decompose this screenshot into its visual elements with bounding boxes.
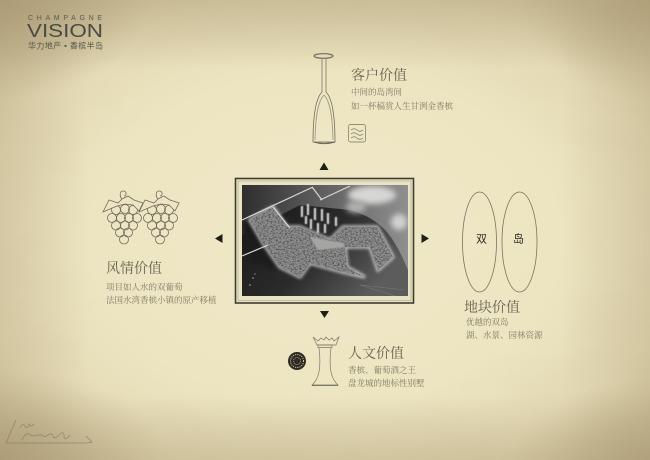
heading: land value: 地块价值	[464, 299, 520, 316]
grape cluster right	[139, 191, 179, 244]
grape cluster left	[103, 191, 143, 244]
arrow: down	[320, 311, 329, 318]
heading: culture value: 人文价值	[348, 345, 404, 362]
land	[250, 207, 393, 277]
icon: crowned tower	[312, 337, 339, 386]
heading: customer value: 客户价值	[351, 67, 407, 84]
decorative handwriting stamp	[6, 420, 92, 443]
text: land value description: 优越的双岛	[466, 317, 509, 327]
icon: twin grape clusters	[103, 191, 179, 244]
logo: Champagne Vision: 华力地产 • 香槟半岛	[28, 40, 103, 50]
heading: charm value: 风情价值	[106, 260, 162, 277]
icon: twin island ellipses	[462, 192, 537, 292]
logo: Champagne Vision	[27, 15, 103, 50]
framed aerial photo	[236, 178, 414, 303]
icon: champagne flute	[313, 54, 335, 144]
logo: Champagne Vision: VISION	[27, 21, 103, 41]
block: customer value	[313, 54, 454, 144]
icon: water waves badge	[348, 124, 366, 142]
icon: twin island ellipses: 双	[476, 232, 487, 246]
text: culture value description: 香槟、葡萄酒之王	[348, 365, 417, 375]
text: charm value description	[106, 282, 217, 305]
block: charm value	[103, 191, 217, 305]
arrow: up	[320, 162, 328, 170]
aerial image of the peninsula	[242, 185, 408, 296]
arrow: right	[422, 234, 429, 243]
text: charm value description: 项目如人水的双葡萄	[106, 282, 183, 292]
text: culture value description	[348, 365, 425, 388]
land halo	[250, 207, 393, 277]
logo: Champagne Vision: CHAMPAGNE	[28, 15, 102, 22]
text: customer value description: 中间的岛湾间	[351, 87, 402, 97]
block: land value	[462, 192, 543, 340]
icon: twin island ellipses: 岛	[513, 232, 524, 246]
icon: round medallion	[288, 352, 306, 370]
block: culture value	[288, 337, 425, 388]
text: customer value description: 如一杯稿赏人生甘洌金香槟	[351, 101, 454, 111]
text: land value description	[466, 317, 543, 340]
text: customer value description	[351, 87, 454, 111]
text: charm value description: 法国水湾香槟小镇的原产移植	[106, 295, 217, 305]
arrow: left	[215, 234, 222, 243]
towers	[302, 204, 336, 233]
text: culture value description: 盘龙城的地标性别墅	[348, 378, 425, 388]
text: land value description: 湖、水景、园林资源	[466, 330, 543, 340]
